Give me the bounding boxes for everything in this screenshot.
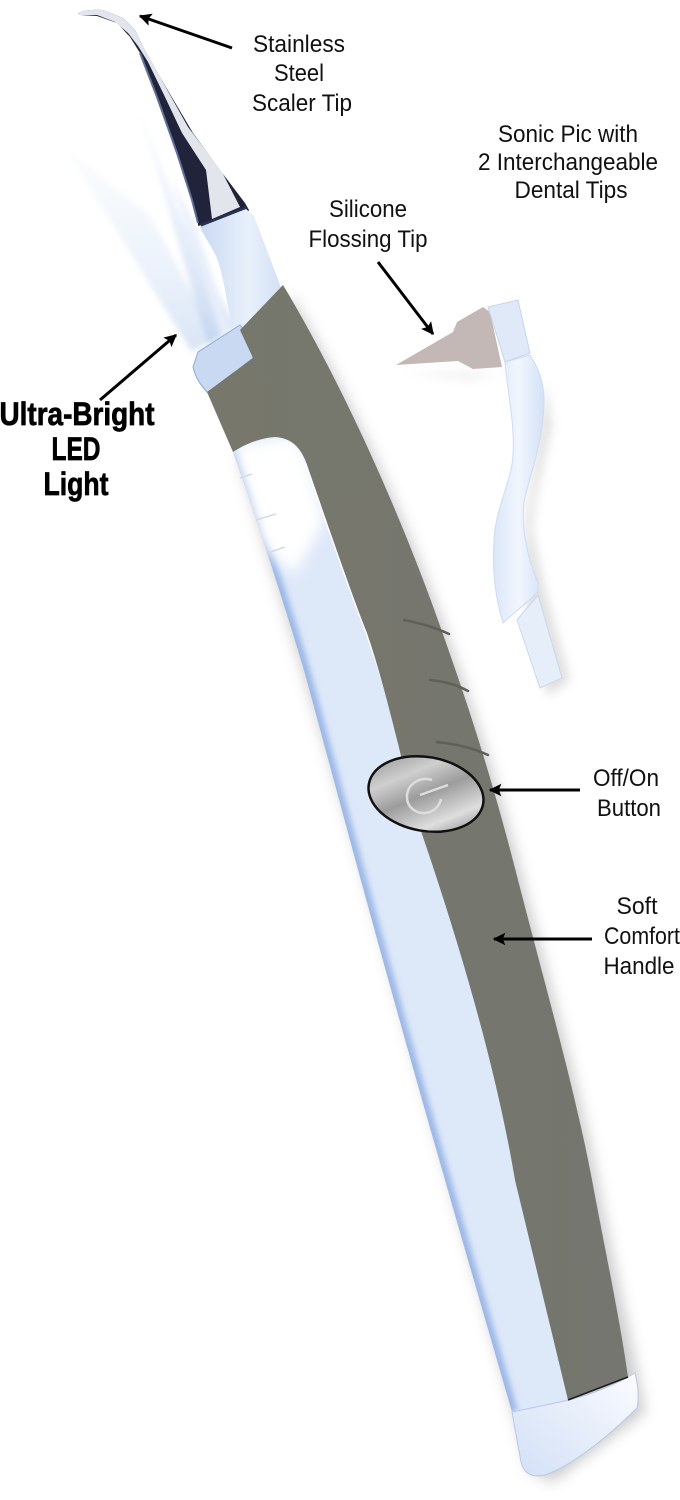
arrow to handle (494, 938, 592, 940)
label: Sonic Pic with 2 Interchangeable Dental Tips: 2 Interchangeable (478, 149, 658, 176)
label: Stainless Steel Scaler Tip: Scaler Tip (252, 90, 352, 117)
light beam: LED glow (65, 105, 236, 352)
grip ridges (404, 620, 488, 755)
label: Off/On Button: Button (597, 795, 661, 822)
head (488, 300, 530, 362)
shaft dark body (78, 10, 249, 226)
scaler tip: stainless steel (78, 10, 249, 228)
LED collar (193, 325, 253, 393)
arrow to silicone tip (378, 262, 433, 334)
arrow to LED light (100, 335, 176, 400)
label: Silicone Flossing Tip: Silicone (329, 196, 407, 223)
shaft silver highlight (78, 10, 240, 219)
label: Off/On Button (593, 765, 661, 822)
label: Soft Comfort Handle (604, 893, 680, 980)
white curved stem (493, 355, 544, 623)
label: Sonic Pic with 2 Interchangeable Dental Tips: Sonic Pic with (498, 121, 638, 148)
flossing attachment (396, 300, 562, 688)
label: Silicone Flossing Tip: Flossing Tip (308, 226, 428, 253)
silicone flossing cone (396, 307, 502, 369)
label: Soft Comfort Handle: Soft (616, 893, 658, 920)
label: Ultra-Bright LED Light (0, 396, 155, 502)
arrow to scaler tip (140, 16, 232, 48)
label: Off/On Button: Off/On (593, 765, 659, 792)
label: Ultra-Bright LED Light: Light (44, 466, 109, 502)
label: Soft Comfort Handle: Handle (604, 953, 674, 980)
handle: soft gray grip (207, 285, 628, 1400)
end cap (512, 1373, 638, 1476)
drop shadow: handle (240, 295, 645, 1482)
white stem base (517, 595, 562, 688)
label: Sonic Pic with 2 Interchangeable Dental Tips (478, 121, 658, 204)
arrow to button (490, 788, 580, 792)
silicone neck (200, 209, 282, 332)
drop shadow: flossing tip (405, 365, 570, 695)
handle: white body (232, 435, 568, 1412)
label: Sonic Pic with 2 Interchangeable Dental Tips: Dental Tips (514, 177, 628, 204)
label: Silicone Flossing Tip (308, 196, 428, 253)
handle side notches (240, 474, 285, 553)
label: Ultra-Bright LED Light: LED (52, 431, 100, 467)
label: Stainless Steel Scaler Tip: Steel (274, 60, 324, 87)
label: Stainless Steel Scaler Tip: Stainless (253, 31, 345, 58)
power icon (407, 779, 448, 813)
power button (362, 747, 490, 841)
label: Stainless Steel Scaler Tip (252, 31, 352, 117)
label: Ultra-Bright LED Light: Ultra-Bright (0, 396, 155, 432)
